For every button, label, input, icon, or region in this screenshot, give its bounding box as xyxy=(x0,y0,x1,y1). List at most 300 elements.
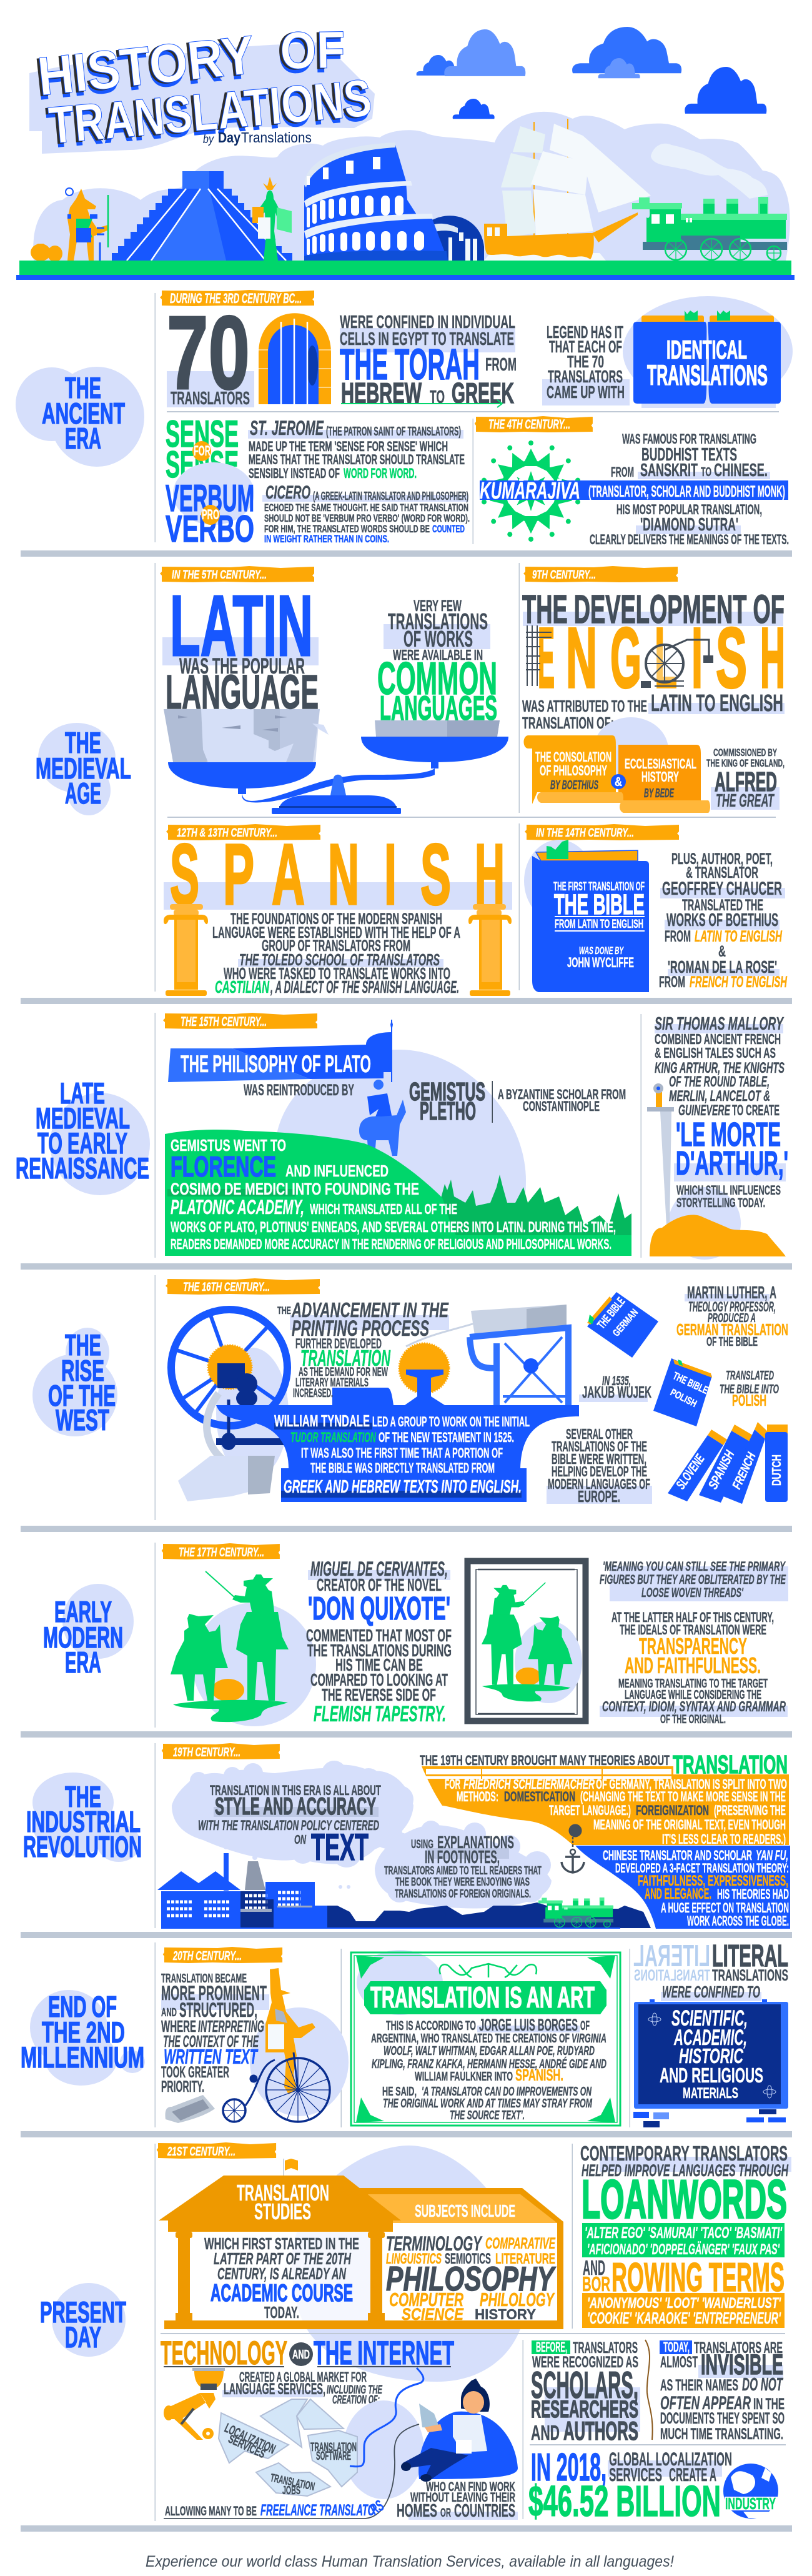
text: miguel de cervantes xyxy=(306,1558,452,1726)
icon: left column xyxy=(164,904,208,996)
text: borges xyxy=(371,2016,607,2122)
text: meaning quote xyxy=(600,1559,788,1601)
byline: Translations xyxy=(241,129,312,146)
text: borges: VIRGINIA xyxy=(572,2032,607,2046)
icon: german bible xyxy=(587,1292,658,1358)
text: latin: WAS THE POPULAR xyxy=(179,654,305,679)
text: today invisible: DO NOT xyxy=(742,2375,783,2395)
icon: kumarajiva burst xyxy=(481,440,581,542)
text: several other translations xyxy=(547,1426,652,1506)
text: miguel de cervantes: HIS TIME CAN BE xyxy=(335,1655,423,1674)
text: gemistus in florence: FLORENCE xyxy=(171,1150,276,1183)
press table xyxy=(216,1388,579,1502)
text: more prominent and structured: AND xyxy=(161,2006,177,2019)
panel: yan fu blue: AND ELEGANCE. xyxy=(645,1886,711,1902)
text: legend: TRANSLATORS xyxy=(548,367,623,386)
era heading: RENAISSANCE xyxy=(16,1151,149,1185)
text: printing process: TRANSLATION xyxy=(300,1345,391,1371)
text: global market: CREATED A GLOBAL MARKET FOR xyxy=(239,2369,367,2385)
text: before translators: AUTHORS xyxy=(563,2416,638,2445)
title: history of translations: HISTORY xyxy=(35,24,257,107)
tag: 17th century xyxy=(162,1543,280,1559)
text: more prominent and structured: MORE PROMINENT xyxy=(161,1982,267,2004)
title: history of translations: TRANSLATIONS xyxy=(44,69,372,156)
panel: early modern era xyxy=(43,1543,788,1728)
text: before translators: AND xyxy=(531,2421,560,2444)
era heading xyxy=(36,723,131,815)
right gear and frame xyxy=(471,1305,567,1335)
byline xyxy=(203,129,312,146)
icon: printing press xyxy=(171,1305,579,1502)
text: common languages: VERY FEW xyxy=(413,597,462,615)
panel: schleiermacher orange: DOMESTICATION xyxy=(504,1789,575,1804)
panel: translation is an art xyxy=(351,1950,620,2126)
text: before translators: BEFORE, xyxy=(536,2339,567,2355)
text: gemistus pletho: CONSTANTINOPLE xyxy=(523,1098,600,1114)
title background ribbon xyxy=(29,42,375,154)
icon: bible book: THE BIBLE xyxy=(554,888,645,920)
text: torah: FROM xyxy=(485,355,517,375)
text: explanations in footnotes: USING xyxy=(411,1838,433,1851)
text: st. jerome: (THE PATRON SAINT OF TRANSLATORS) xyxy=(326,425,461,439)
heading: technology and the internet: THE INTERNET xyxy=(314,2335,454,2372)
icon: globe xyxy=(723,2464,778,2519)
text: torah: TO xyxy=(430,387,445,407)
icon: ship xyxy=(484,119,651,261)
text: kumarajiva description: TO xyxy=(701,465,711,479)
text: more prominent and structured: INTERPRETING xyxy=(198,2017,264,2036)
heading: spanish: S xyxy=(420,827,451,923)
panel: late medieval to early renaissance xyxy=(16,1013,788,1260)
tag: 4th century: THE 4TH CENTURY... xyxy=(488,417,570,432)
heading: the development of english: N xyxy=(566,610,597,706)
text: literal translations mirrored xyxy=(633,1939,788,2001)
text: toledo school: WHO WERE TASKED TO TRANSLATE WORKS INTO xyxy=(224,964,450,983)
era heading: MILLENNIUM xyxy=(21,2041,144,2074)
text: miguel de cervantes: THE TRANSLATIONS DURING xyxy=(307,1641,452,1660)
era heading xyxy=(32,1328,117,1436)
title: history of translations: TRANSLATIONS xyxy=(46,68,374,155)
tag: 4th century xyxy=(475,416,593,432)
text: before translators: TRANSLATORS xyxy=(573,2339,638,2357)
text: gemistus in florence xyxy=(167,1136,616,1252)
text: academic course: CENTURY, IS ALREADY AN xyxy=(217,2264,347,2283)
era heading: THE xyxy=(65,1780,101,1813)
text: several other translations: EUROPE. xyxy=(578,1487,620,1506)
text: martin luther: OF THE BIBLE xyxy=(706,1335,758,1349)
icon: leaning bibles xyxy=(668,1422,788,1504)
panel: schleiermacher orange: METHODS: xyxy=(457,1789,498,1804)
verbum pro verbo wordmark: VERBO xyxy=(166,508,254,550)
era heading: END OF xyxy=(48,1990,117,2023)
text: william tyndale: GREEK AND HEBREW TEXTS INTO ENGLISH. xyxy=(284,1477,522,1497)
illustration: translation studies building: TRANSLATION xyxy=(237,2180,329,2206)
icon: don quixote and sancho silhouette xyxy=(171,1571,289,1722)
panel: science blackboard xyxy=(634,1999,788,2109)
text: gemistus pletho: A BYZANTINE SCHOLAR FROM xyxy=(498,1087,626,1102)
text: torah: THE TORAH xyxy=(340,340,480,389)
text: subjects word cloud: SCIENCE xyxy=(402,2305,464,2324)
text: subjects word cloud: LITERATURE xyxy=(495,2250,555,2267)
icon: sword in the stone xyxy=(647,1083,786,1260)
text: kumarajiva description: BUDDHIST TEXTS xyxy=(641,445,737,465)
text: borges: WOOLF, WALT WHITMAN, EDGAR ALLAN POE, RUDYARD xyxy=(384,2044,595,2058)
text: subjects word cloud: COMPUTER xyxy=(389,2289,463,2310)
text: today invisible: AS THEIR NAMES xyxy=(660,2377,738,2394)
text: before translators: RESEARCHERS xyxy=(531,2396,638,2423)
text: more prominent and structured: TOOK GREATER xyxy=(161,2064,229,2081)
panel: science blackboard: SCIENTIFIC, xyxy=(671,2006,748,2031)
icon: german bible: GERMAN xyxy=(611,1307,640,1339)
icon: knight xyxy=(252,177,292,261)
text: academic course: TODAY. xyxy=(264,2303,299,2322)
text: legend: THE 70 xyxy=(567,352,604,371)
verbum pro verbo wordmark: VERBUM xyxy=(166,477,254,519)
panel: science blackboard: MATERIALS xyxy=(683,2085,738,2102)
era heading: ANCIENT xyxy=(42,397,125,430)
text: freelance translators: FREELANCE TRANSLATO xyxy=(260,2502,375,2519)
text: william tyndale: OF THE NEW TESTAMENT IN 1525. xyxy=(379,1430,514,1445)
text: miguel de cervantes: COMMENTED THAT MOST OF xyxy=(306,1626,452,1645)
tag: 9th century: 9TH CENTURY... xyxy=(532,569,596,582)
title: history of translations xyxy=(32,20,374,159)
text: style and accuracy: TRANSLATION IN THIS ERA IS ALL ABOUT xyxy=(210,1783,381,1798)
text: style and accuracy: ON xyxy=(294,1833,306,1847)
era heading xyxy=(43,1584,134,1679)
text: william tyndale: LED A GROUP TO WORK ON THE INITIAL xyxy=(372,1414,530,1430)
icon: bible book: FROM LATIN TO ENGLISH xyxy=(555,918,643,931)
text: common languages: OF WORKS xyxy=(404,626,473,652)
icon: scrolls: OF PHILOSOPHY xyxy=(540,762,607,778)
text: style and accuracy xyxy=(198,1783,381,1868)
text: latin to english xyxy=(522,690,785,732)
pale background clouds xyxy=(33,112,790,261)
text: torah xyxy=(340,312,517,409)
icon: polish bible: POLISH xyxy=(668,1387,698,1410)
panel: translation is an art: TRANSLATION IS AN ART xyxy=(370,1981,595,2014)
text: common languages: WERE AVAILABLE IN xyxy=(393,647,483,663)
icon: ladder and water wheel xyxy=(526,625,713,688)
labels on puzzle pieces: LOCALIZATION xyxy=(222,2421,277,2457)
text: martin luther: PRODUCED A xyxy=(708,1311,756,1325)
scale illustration: left stack xyxy=(164,709,329,765)
title: history of translations: TRANSLATIONS xyxy=(44,72,372,159)
title: history of translations: HISTORY xyxy=(32,25,255,108)
banner: philosophy of plato xyxy=(168,1020,393,1082)
text: cicero: FOR HIM, THE TRANSLATED WORDS SHOULD BE xyxy=(264,523,430,535)
text: latin: LATIN xyxy=(170,578,313,674)
illustration: factories and skyline xyxy=(157,1853,651,1929)
heading: the development of english: L xyxy=(655,610,677,706)
panel: schleiermacher orange: FOR xyxy=(445,1776,460,1792)
text: several other translations: HELPING DEVELOP THE xyxy=(552,1463,647,1479)
text: le morte d'arthur xyxy=(655,1014,788,1210)
text: jakub wujek: IN 1535, xyxy=(602,1374,631,1388)
era heading: LATE xyxy=(60,1077,105,1110)
icon: polish bible xyxy=(653,1358,712,1426)
heading: technology and the internet: TECHNOLOGY xyxy=(161,2335,287,2372)
text: toledo school: LANGUAGE WERE ESTABLISHED WITH THE HELP OF A xyxy=(212,924,460,942)
stat: 70 translators: TRANSLATORS xyxy=(171,389,250,409)
text: jakub wujek: JAKUB WUJEK xyxy=(582,1383,651,1401)
tag: 17th century: THE 17TH CENTURY... xyxy=(179,1546,264,1559)
icon: scrolls: ECCLESIASTICAL xyxy=(625,756,696,772)
icon: anubis xyxy=(66,188,109,261)
text: torah: HEBREW xyxy=(341,377,422,409)
text: borges: HE SAID, xyxy=(382,2085,417,2099)
text: toledo school: THE TOLEDO SCHOOL OF TRANSLATORS xyxy=(239,950,440,969)
text: borges: OF xyxy=(580,2019,590,2033)
heading: spanish: N xyxy=(328,827,359,923)
panel: schleiermacher orange: FRIEDRICH SCHLEIERMACHER xyxy=(463,1776,595,1792)
illustration: translation studies building: STUDIES xyxy=(254,2199,311,2224)
text: global market xyxy=(222,2369,383,2407)
icon: scrolls xyxy=(523,717,710,813)
text: explanations in footnotes: TRANSLATORS AIMED TO TELL READERS THAT xyxy=(384,1864,542,1877)
text: st. jerome: ST. JEROME xyxy=(250,417,324,439)
panel: present day xyxy=(40,2142,791,2525)
sense for sense wordmark: SENSE xyxy=(166,444,239,485)
icon: scrolls: HISTORY xyxy=(641,768,679,785)
era heading: ERA xyxy=(65,1646,101,1679)
text: william tyndale: WILLIAM TYNDALE xyxy=(274,1411,370,1430)
stat: 70 translators: 70 xyxy=(167,295,250,411)
text: latin to english: WAS ATTRIBUTED TO THE xyxy=(522,697,647,715)
text: borges: 'A TRANSLATOR CAN DO IMPROVEMENTS ON xyxy=(422,2085,592,2099)
text: borges: THIS IS ACCORDING TO xyxy=(386,2019,476,2033)
tag: 16th century xyxy=(166,1278,320,1295)
text: cicero: COUNTED xyxy=(432,523,465,535)
text: explanations in footnotes xyxy=(384,1833,542,1900)
text: printing process xyxy=(277,1298,449,1400)
icon: balance scale xyxy=(168,720,508,814)
text: today invisible: IN THE xyxy=(753,2395,785,2413)
text: cicero: SHOULD NOT BE 'VERBUM PRO VERBO' (WORD FOR WORD). xyxy=(264,512,470,524)
text: today invisible: TODAY, xyxy=(663,2339,690,2355)
tag: 3rd century: DURING THE 3RD CENTURY BC... xyxy=(170,291,302,306)
text: common languages: LANGUAGES xyxy=(380,689,497,727)
text: kumarajiva description: 'DIAMOND SUTRA' xyxy=(640,515,738,535)
text: kumarajiva description xyxy=(590,431,789,547)
stat: 46.52 billion industry: IN 2018, xyxy=(531,2446,607,2489)
era heading: INDUSTRIAL xyxy=(26,1805,141,1838)
heading: 19th century theories xyxy=(420,1750,788,1779)
title: history of translations: OF xyxy=(280,20,345,80)
text: miguel de cervantes: MIGUEL DE CERVANTES, xyxy=(310,1558,448,1580)
stat: 46.52 billion industry: SERVICES xyxy=(609,2465,662,2485)
icon: pyramid xyxy=(112,171,292,261)
stat: 46.52 billion industry xyxy=(528,2446,776,2525)
text: gemistus pletho xyxy=(244,1077,626,1125)
text: gemistus pletho: GEMISTUS xyxy=(409,1077,485,1106)
text: more prominent and structured: THE CONTEXT OF THE xyxy=(163,2032,259,2051)
text: several other translations: SEVERAL OTHER xyxy=(566,1426,633,1442)
text: jakub wujek xyxy=(579,1374,651,1402)
icon: anchor and chain xyxy=(562,1824,584,1872)
text: transparency and faithfulness xyxy=(600,1609,788,1726)
text: miguel de cervantes: COMPARED TO LOOKING AT xyxy=(310,1670,448,1689)
text: translated into polish xyxy=(720,1369,779,1410)
text: more prominent and structured: WHERE xyxy=(161,2017,196,2036)
text: printing process: LITERARY MATERIALS xyxy=(295,1376,369,1390)
sense for sense wordmark: SENSE xyxy=(166,413,239,455)
icon: polish bible: THE BIBLE xyxy=(671,1370,710,1396)
text: global market: LANGUAGE SERVICES, xyxy=(224,2380,325,2398)
icon: framed tapestry xyxy=(467,1561,586,1721)
text: loanwords: BOR xyxy=(582,2272,610,2295)
text: latin to english: TRANSLATION OF: xyxy=(522,714,614,732)
text: printing process: FURTHER DEVELOPED xyxy=(295,1336,382,1351)
text: cicero: (A GREEK-LATIN TRANSLATOR AND PHILOSOPHER) xyxy=(313,490,468,502)
text: freelance translators: ALLOWING MANY TO BE xyxy=(165,2504,257,2519)
era heading xyxy=(16,367,144,467)
illustration: translation studies building xyxy=(159,2159,563,2329)
text: several other translations: MODERN LANGUAGES OF xyxy=(548,1476,650,1492)
text: william tyndale: IT WAS ALSO THE FIRST TIME THAT A PORTION OF xyxy=(301,1445,503,1461)
text: alfred the great xyxy=(706,747,785,811)
era heading: THE 2ND xyxy=(42,2016,125,2049)
era heading: ERA xyxy=(65,422,101,455)
era heading: MODERN xyxy=(43,1621,123,1654)
text: freelance translators xyxy=(165,2497,387,2519)
text: transparency and faithfulness: OF THE ORIGINAL. xyxy=(660,1713,726,1726)
icon: right column xyxy=(468,904,512,996)
illustration: translation studies building: SUBJECTS INCLUDE xyxy=(415,2201,515,2220)
text: legend: LEGEND HAS IT xyxy=(547,322,623,342)
text: torah: WERE CONFINED IN INDIVIDUAL xyxy=(340,312,515,332)
icon: german bible: THE BIBLE xyxy=(595,1295,628,1331)
icon: penny-farthing rider xyxy=(223,1968,330,2122)
smoke xyxy=(651,144,768,199)
text: gemistus pletho: WAS REINTRODUCED BY xyxy=(244,1082,354,1099)
icon: bible book: JOHN WYCLIFFE xyxy=(567,955,634,970)
panel: schleiermacher orange xyxy=(422,1766,789,1847)
verbum pro verbo wordmark xyxy=(166,462,254,550)
text: miguel de cervantes: THE REVERSE SIDE OF xyxy=(322,1685,436,1704)
text: find work at home: HOMES xyxy=(397,2501,437,2521)
text: geoffrey chaucer: & xyxy=(718,943,726,960)
icon: bible book: THE FIRST TRANSLATION OF xyxy=(553,880,645,893)
text: gemistus in florence: PLATONIC ACADEMY, xyxy=(171,1196,304,1218)
text: subjects word cloud: HISTORY xyxy=(475,2306,536,2322)
text: explanations in footnotes: TRANSLATIONS OF FOREIGN ORIGINALS. xyxy=(395,1887,531,1900)
panel: the industrial revolution xyxy=(23,1743,790,1929)
icon: knight on horseback xyxy=(359,1080,406,1156)
heading: spanish: H xyxy=(475,827,505,923)
icon: leaning bibles: SLOVENE xyxy=(673,1451,708,1492)
text: printing process: PRINTING PROCESS xyxy=(292,1316,429,1341)
text: gemistus in florence: WHICH TRANSLATED ALL OF THE xyxy=(310,1201,457,1217)
paper ribbon and stacks xyxy=(207,1393,231,1465)
text: gemistus in florence: GEMISTUS WENT TO xyxy=(171,1136,286,1155)
text: miguel de cervantes: CREATOR OF THE NOVEL xyxy=(317,1575,442,1594)
text: academic course: ACADEMIC COURSE xyxy=(210,2280,353,2307)
text: meaning quote: LOOSE WOVEN THREADS' xyxy=(641,1586,744,1600)
title: history of translations: OF xyxy=(277,24,343,84)
text: several other translations: BIBLE WERE WRITTEN, xyxy=(552,1451,646,1467)
text: borges: JORGE LUIS BORGES xyxy=(479,2016,578,2034)
panel: schleiermacher orange: FOREIGNIZATION xyxy=(636,1803,709,1818)
tag: 5th century: IN THE 5TH CENTURY... xyxy=(172,569,267,582)
text: legend xyxy=(542,322,630,405)
text: st. jerome: MEANS THAT THE TRANSLATOR SHOULD TRANSLATE xyxy=(249,452,465,467)
tag: 20th century: 20TH CENTURY... xyxy=(172,1949,242,1963)
panel: schleiermacher orange: TARGET LANGUAGE.) xyxy=(549,1803,631,1818)
text: more prominent and structured: STRUCTURED, xyxy=(179,1999,257,2021)
text: printing process: THE xyxy=(277,1305,291,1316)
text: printing process: INCREASED. xyxy=(293,1387,333,1400)
text: borges: ARGENTINA, WHO TRANSLATED THE CREATIONS OF xyxy=(371,2032,570,2046)
panel: the ancient era xyxy=(16,290,793,550)
icon: bible book: WAS DONE BY xyxy=(579,945,624,957)
text: legend: THAT EACH OF xyxy=(549,337,622,356)
era heading: DAY xyxy=(65,2320,101,2354)
text: cicero xyxy=(262,482,470,545)
byline: Day xyxy=(218,129,240,146)
era heading: THE xyxy=(65,726,101,759)
text: today invisible: OFTEN APPEAR xyxy=(660,2393,751,2414)
text: toledo school: , A DIALECT OF THE SPANISH LANGUAGE. xyxy=(270,977,459,997)
icon: scrolls: THE CONSOLATION xyxy=(535,749,611,765)
text: academic course xyxy=(204,2234,359,2322)
text: printing process: AS THE DEMAND FOR NEW xyxy=(299,1366,388,1379)
header: title and historical scene xyxy=(16,20,795,280)
text: st. jerome: SENSIBLY INSTEAD OF xyxy=(249,465,340,481)
smoke clouds xyxy=(172,1761,552,1910)
text: common languages: COMMON xyxy=(377,654,497,704)
text: today invisible xyxy=(660,2339,785,2443)
era heading: AGE xyxy=(65,777,101,810)
ground strip xyxy=(19,261,791,276)
kumarajiva name bar: KUMĀRAJĪVA xyxy=(480,478,580,504)
text: miguel de cervantes: 'DON QUIXOTE' xyxy=(308,1591,450,1627)
text: subjects word cloud: LINGUISTICS xyxy=(386,2250,442,2267)
text: toledo school: THE FOUNDATIONS OF THE MODERN SPANISH xyxy=(230,910,442,928)
labels on puzzle pieces: TRANSLATION xyxy=(269,2471,316,2493)
icon: scrolls: BY BEDE xyxy=(644,787,674,800)
flywheel xyxy=(171,1310,287,1426)
icon: globe puzzle pieces xyxy=(219,2399,357,2496)
text: loanwords xyxy=(580,2142,791,2328)
sense for sense wordmark: FOR xyxy=(194,443,210,459)
text: cicero: ECHOED THE SAME THOUGHT. HE SAID THAT TRANSLATION xyxy=(264,502,468,514)
era heading: OF THE xyxy=(48,1379,116,1412)
byline: by xyxy=(203,133,214,146)
text: borges: KIPLING, FRANZ KAFKA, HERMANN HESSE, ANDRÉ GIDE AND xyxy=(372,2057,607,2071)
era heading xyxy=(21,1990,145,2086)
text: gemistus pletho: PLETHO xyxy=(420,1097,476,1125)
text: geoffrey chaucer: FROM xyxy=(665,928,691,945)
text: borges: THE SOURCE TEXT'. xyxy=(450,2109,525,2122)
text: translated into polish: POLISH xyxy=(732,1392,766,1410)
era heading: THE xyxy=(65,1328,101,1361)
icon: colosseum xyxy=(304,142,484,261)
heading: the development of english: G xyxy=(610,610,641,706)
panel: end of the 2nd millennium xyxy=(21,1939,788,2127)
text: explanations in footnotes: IN FOOTNOTES, xyxy=(425,1847,500,1867)
heading: technology and the internet: AND xyxy=(292,2348,310,2362)
icon: open book with identical translations xyxy=(623,296,793,408)
text: geoffrey chaucer: FROM xyxy=(659,973,685,991)
title: history of translations: HISTORY xyxy=(33,29,255,112)
heading: the development of english: E xyxy=(538,610,555,706)
text: global market: CREATION OF: xyxy=(332,2394,380,2407)
title: history of translations: OF xyxy=(277,21,343,81)
era heading: MEDIEVAL xyxy=(36,752,131,785)
kumarajiva name bar xyxy=(480,478,788,504)
stat: 46.52 billion industry: CREATE A xyxy=(669,2465,716,2485)
text: style and accuracy: TEXT xyxy=(311,1826,369,1868)
